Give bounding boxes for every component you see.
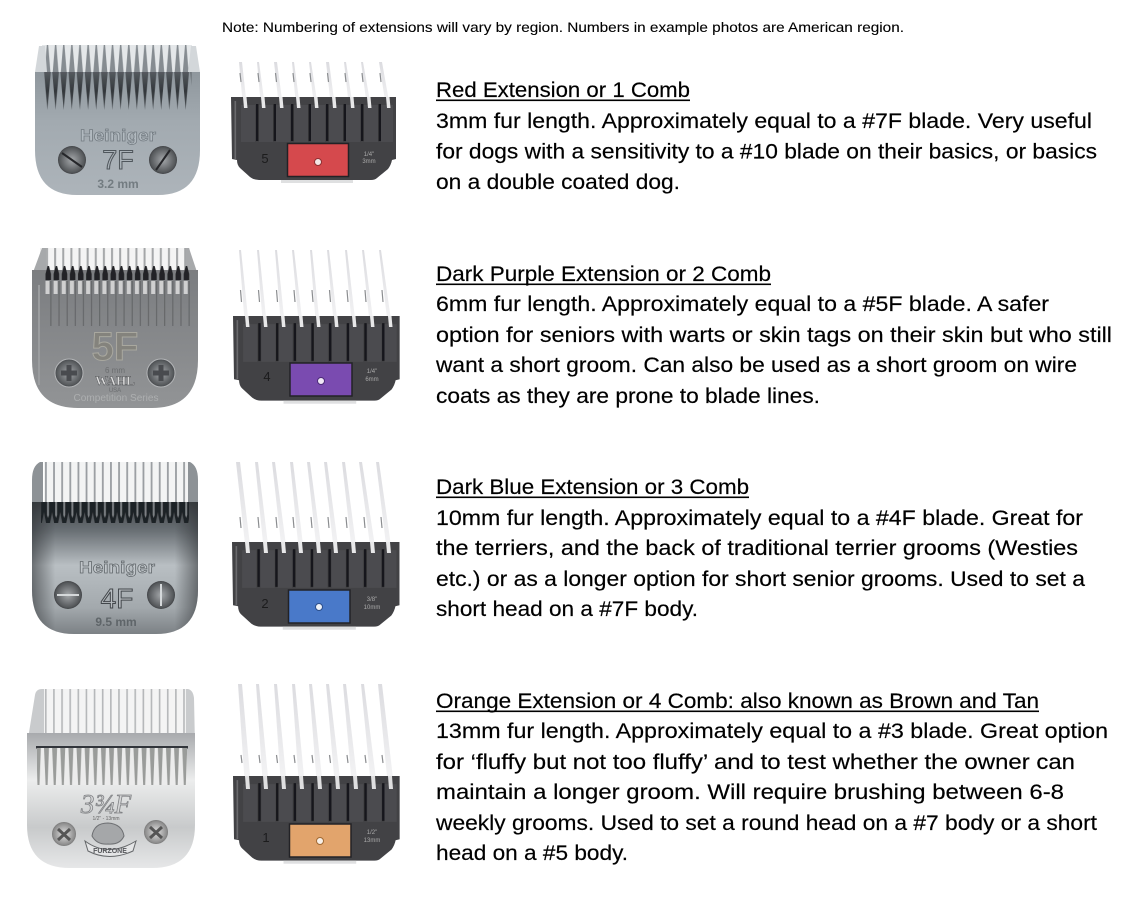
row: red extension (35, 45, 1097, 195)
text: red extension: for dogs with a sensitivity to a #10 blade on their basics, or basics (436, 140, 1097, 164)
comb: orange: 1/2" (367, 830, 377, 836)
blade: 4F: Heiniger (79, 558, 155, 577)
comb: blue: 3/8" (367, 597, 377, 603)
comb: red: 5 (261, 151, 269, 166)
text: red extension (436, 78, 1097, 194)
note: Note: Numbering of extensions will vary by region. Numbers in example photos are American region. (222, 19, 904, 35)
blade: 4F (32, 462, 198, 634)
text: dark blue extension: the terriers, and the back of traditional terrier grooms (Westies (436, 536, 1078, 560)
comb: red: 1/4" (364, 152, 374, 158)
blade: 7F: Heiniger (80, 126, 156, 145)
blade: 3 3/4 F: FURZONE (93, 848, 127, 855)
text: dark purple extension: option for seniors with warts or skin tags on their skin but who still (436, 323, 1112, 347)
blade: 3 3/4 F (27, 689, 195, 868)
blade: 5F: 6 mm (105, 366, 125, 375)
comb: purple: 1/4" (367, 369, 377, 375)
comb: purple (233, 250, 400, 404)
row: dark purple extension (32, 248, 1112, 408)
text: red extension: Red Extension or 1 Comb (436, 78, 690, 102)
text: red extension: on a double coated dog. (436, 170, 680, 194)
comb: blue: 10mm (364, 605, 380, 611)
comb: orange (233, 684, 400, 864)
text: orange extension: head on a #5 body. (436, 841, 628, 865)
blade: 5F (32, 248, 198, 408)
text: dark purple extension: Dark Purple Extension or 2 Comb (436, 262, 771, 286)
blade: 3 3/4 F: 1/2" - 13mm (92, 816, 120, 822)
blade: 7F (35, 45, 200, 195)
blade: 5F: USA (109, 388, 121, 394)
text: dark blue extension (436, 475, 1085, 621)
comb: orange: 13mm (364, 838, 380, 844)
comb: purple: 6mm (365, 377, 379, 383)
text: dark purple extension: 6mm fur length. Approximately equal to a #5F blade. A safer (436, 292, 1049, 316)
text: dark purple extension: want a short groom. Can also be used as a short groom on wire (435, 353, 1077, 377)
text: orange extension: maintain a longer groom. Will require brushing between 6-8 (436, 780, 1064, 804)
row: orange extension (27, 684, 1108, 868)
row: dark blue extension (32, 462, 1085, 634)
blade: 4F: 4F (101, 583, 133, 614)
text: dark purple extension: coats as they are prone to blade lines. (436, 384, 820, 408)
text: orange extension (435, 689, 1108, 865)
text: orange extension: 13mm fur length. Approximately equal to a #3 blade. Great option (436, 719, 1108, 743)
comb: purple: 4 (263, 369, 271, 384)
comb: blue: 2 (261, 596, 269, 611)
text: dark blue extension: short head on a #7F body. (436, 597, 698, 621)
blade: 4F: 9.5 mm (95, 615, 137, 629)
comb: red (231, 62, 396, 183)
comb: blue (232, 462, 399, 630)
text: dark purple extension (435, 262, 1112, 408)
blade: 7F: 3.2 mm (97, 177, 139, 191)
text: orange extension: Orange Extension or 4 Comb: also known as Brown and Tan (436, 689, 1039, 713)
blade: 5F: Competition Series (74, 393, 158, 404)
comb: orange: 1 (262, 830, 270, 845)
text: red extension: 3mm fur length. Approximately equal to a #7F blade. Very useful (436, 109, 1092, 133)
blade: 5F: WAHL (95, 373, 135, 388)
text: orange extension: for ‘fluffy but not too fluffy’ and to test whether the owner can (436, 750, 1075, 774)
text: dark blue extension: 10mm fur length. Approximately equal to a #4F blade. Great for (436, 506, 1083, 530)
blade: 7F: 7F (102, 145, 134, 175)
icon: lion emblem (92, 823, 124, 844)
blade: 3 3/4 F: 3¾F (80, 789, 132, 819)
comb: red: 3mm (362, 159, 376, 165)
text: dark blue extension: Dark Blue Extension or 3 Comb (436, 475, 749, 499)
blade: 5F: 5F (92, 325, 138, 369)
text: dark blue extension: etc.) or as a longer option for short senior grooms. Used to set a (436, 567, 1085, 591)
text: orange extension: weekly grooms. Used to set a round head on a #7 body or a short (435, 811, 1097, 835)
